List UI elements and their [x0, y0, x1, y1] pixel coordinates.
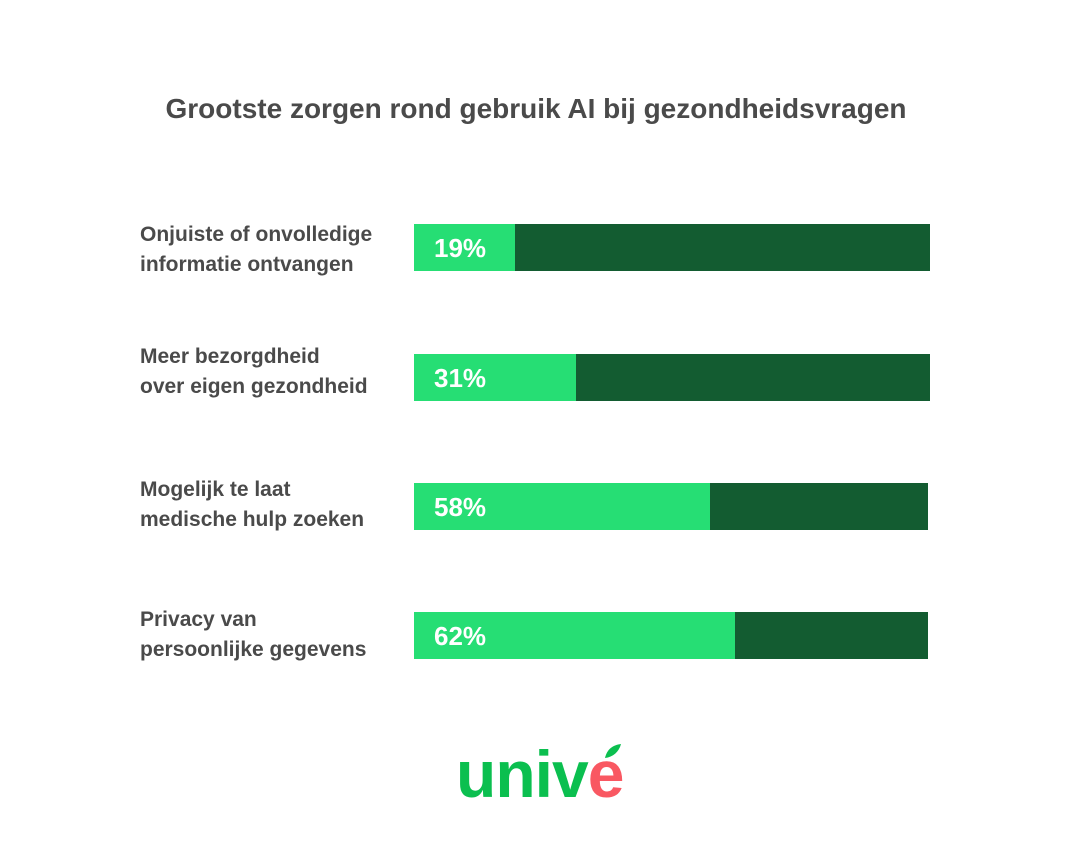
label: row 1 — [140, 223, 372, 276]
label: row 4 — [140, 608, 366, 661]
bar: row 3 — [414, 483, 928, 530]
label: row 2: over eigen gezondheid — [140, 375, 368, 398]
label: row 4: persoonlijke gegevens — [140, 638, 366, 661]
label: row 1: Onjuiste of onvolledige — [140, 223, 372, 246]
label: row 3: medische hulp zoeken — [140, 508, 364, 531]
label: row 3 — [140, 478, 364, 531]
bar: row 1 — [414, 224, 930, 271]
label: row 2 — [140, 345, 368, 398]
label: row 1: informatie ontvangen — [140, 253, 354, 276]
title: Grootste zorgen rond gebruik AI bij gezondheidsvragen — [165, 93, 907, 124]
label: row 2: Meer bezorgdheid — [140, 345, 320, 368]
bar: row 2 — [414, 354, 930, 401]
label: row 3: Mogelijk te laat — [140, 478, 291, 501]
bar: row 2: 31% — [434, 363, 486, 393]
bar: row 4 — [414, 612, 928, 659]
bar: row 1: 19% — [434, 233, 486, 263]
label: row 4: Privacy van — [140, 608, 257, 631]
bar: row 4: 62% — [434, 621, 486, 651]
bar: row 3: 58% — [434, 492, 486, 522]
